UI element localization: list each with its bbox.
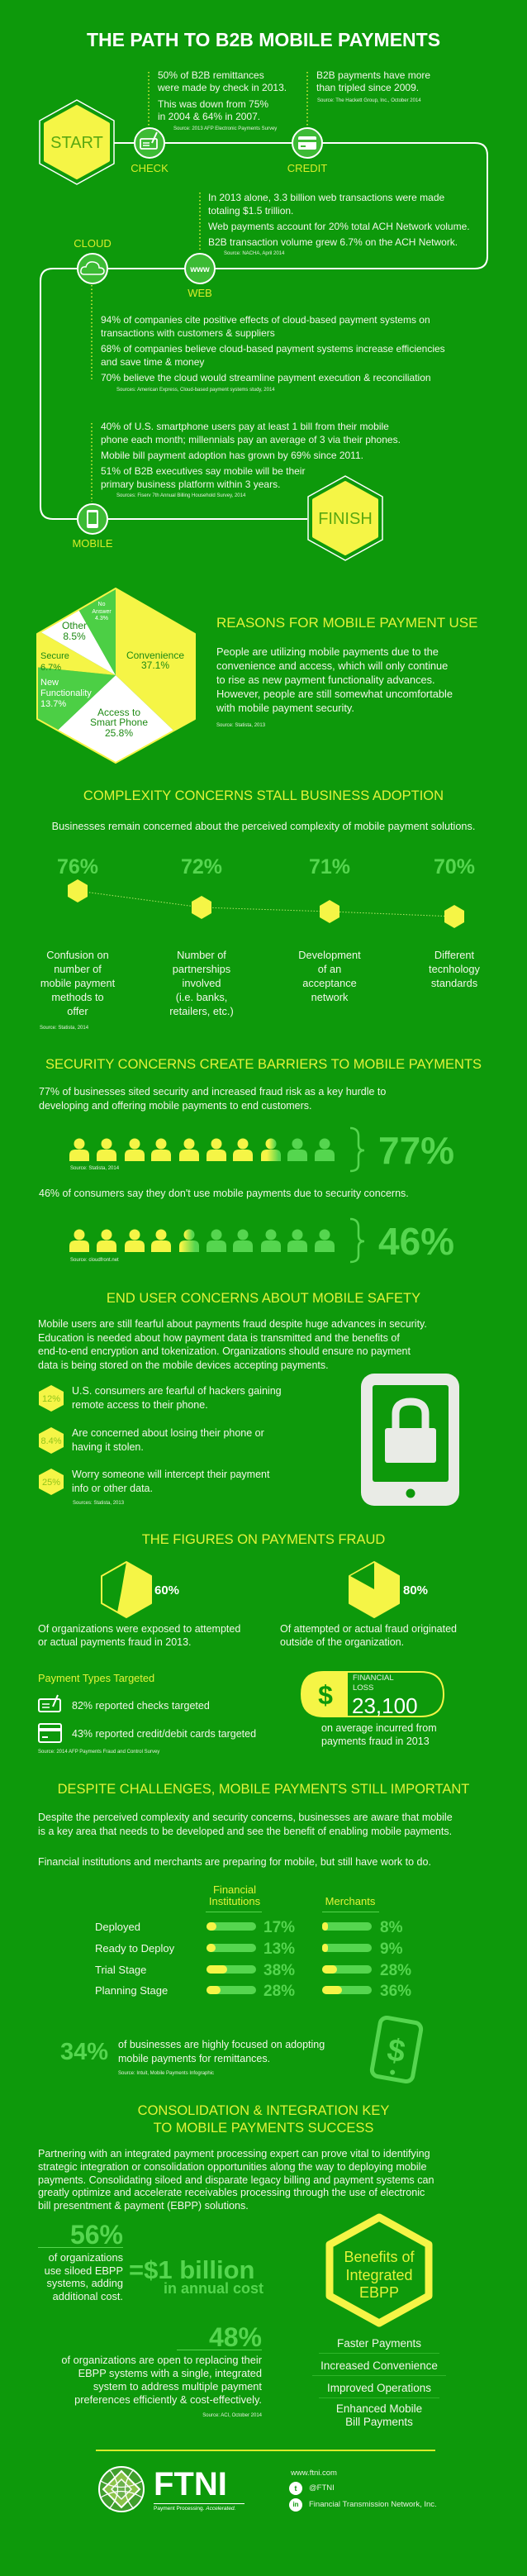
complexity labels: number of	[54, 963, 102, 975]
heading: end user: END USER CONCERNS ABOUT MOBILE SAFETY	[107, 1291, 420, 1306]
text: despite	[38, 1812, 453, 1837]
chart: readiness bars: Merchants	[325, 1895, 375, 1907]
heading: reasons: REASONS FOR MOBILE PAYMENT USE	[216, 615, 477, 631]
complexity labels: partnerships	[173, 963, 230, 975]
callout: financial loss: $	[318, 1680, 333, 1710]
complexity labels	[40, 949, 480, 1017]
text: Worry someone will intercept their payment	[72, 1469, 269, 1480]
text: Are concerned about losing their phone or	[72, 1427, 264, 1439]
text: reasons: with mobile payment security.	[216, 702, 354, 714]
text: 48%: system to address multiple payment	[93, 2380, 262, 2393]
chart: readiness bars: 17%	[264, 1919, 295, 1936]
label: web: WEB	[188, 287, 212, 299]
pie chart hexagon: Other	[62, 620, 87, 631]
pie chart hexagon: Access to	[97, 707, 140, 718]
payment types list: 82% reported checks targeted	[72, 1700, 210, 1712]
complexity labels: mobile payment	[40, 977, 115, 989]
chart: complexity	[57, 855, 475, 928]
chart: complexity: 76%	[57, 855, 98, 879]
START hexagon	[40, 100, 114, 184]
text: mobile facts	[101, 421, 401, 490]
text: credit facts: than tripled since 2009.	[316, 82, 419, 93]
source: cloud: Sources: American Express, Cloud-based payment systems study, 2014	[116, 388, 275, 393]
source: mobile: Sources: Fiserv 7th Annual Billing Household Survey, 2014	[116, 493, 245, 498]
START hexagon: START	[50, 134, 103, 152]
text: web facts: totaling $1.5 trillion. Web payments account for 20% total ACH Network volume. B2B transaction volume grew 6.7% on the ACH Network.	[208, 205, 470, 248]
text: 48%	[61, 2354, 262, 2406]
complexity labels: Development	[298, 949, 361, 961]
bullet hexagons: 12%	[42, 1394, 60, 1404]
complexity labels: of an	[318, 963, 341, 975]
text: 34%	[118, 2039, 325, 2064]
text: end user: data is being stored on the mobile devices accepting payments.	[38, 1359, 329, 1371]
chart: fraud hexagons	[101, 1561, 428, 1618]
chart: readiness bars: Trial Stage	[95, 1964, 146, 1976]
text: reasons: to rise as new payment functionality advances.	[216, 674, 435, 686]
callout: financial loss	[301, 1671, 444, 1718]
bullet hexagons: 8.4%	[40, 1436, 62, 1446]
complexity labels: network	[311, 991, 348, 1003]
text: check facts: were made by check in 2013. This was down from 75%	[158, 82, 287, 110]
footer contacts: @FTNI	[309, 2483, 335, 2493]
complexity labels: methods to	[51, 991, 104, 1003]
footer contacts: www.ftni.com	[291, 2469, 337, 2478]
chart: readiness bars: Deployed	[95, 1921, 140, 1933]
text: fraud 80: Of attempted or actual fraud originated	[280, 1623, 457, 1635]
title: THE PATH TO B2B MOBILE PAYMENTS	[87, 29, 440, 50]
text: fraud 60: or actual payments fraud in 2013.	[38, 1636, 192, 1648]
text: complexity: Businesses remain concerned about the perceived complexity of mobile payment solutions.	[52, 821, 475, 832]
hexagon: benefits: Benefits of	[344, 2249, 415, 2265]
pie chart hexagon: 13.7%	[40, 699, 66, 709]
hexagon: benefits: EBPP	[359, 2284, 399, 2301]
text: consolidation: Partnering with an integrated payment processing expert can prove vital to identifying	[38, 2148, 430, 2159]
complexity labels: involved	[183, 977, 221, 989]
complexity labels: Number of	[177, 949, 226, 961]
text: cloud facts	[101, 314, 445, 383]
text: info or other data.	[72, 1483, 153, 1494]
text: cloud facts: and save time & money 70% believe the cloud would streamline payment execution & reconciliation	[101, 355, 431, 383]
path diagram	[39, 72, 488, 561]
payment types list: 43% reported credit/debit cards targeted	[72, 1728, 256, 1740]
pie chart hexagon	[36, 588, 196, 764]
text: 48%: EBPP systems with a single, integrated	[78, 2367, 262, 2379]
text: fraud 80	[280, 1623, 457, 1648]
complexity labels: retailers, etc.)	[169, 1005, 234, 1017]
text: 46% consumers: 46% of consumers say they don't use mobile payments due to security concerns.	[39, 1188, 409, 1199]
pie chart hexagon: 8.5%	[63, 631, 86, 642]
heading: consolidation: CONSOLIDATION & INTEGRATION KEY	[138, 2103, 389, 2118]
text: consolidation: payments. Consolidating siloed and disparate legacy billing and payment systems can	[38, 2174, 434, 2186]
chart: readiness bars: Institutions	[209, 1895, 260, 1907]
chart: complexity: 72%	[181, 855, 222, 879]
stat: $1 billion: =$1 billion	[129, 2255, 254, 2284]
label: credit: CREDIT	[287, 162, 327, 174]
source: 34%: Source: Intuit, Mobile Payments Infographic	[118, 2071, 214, 2076]
chart: complexity: 70%	[434, 855, 475, 879]
complexity labels: tecnhology	[429, 963, 480, 975]
icon: phone with lock	[361, 1374, 459, 1506]
text: 56%	[45, 2251, 123, 2302]
text: end user	[38, 1318, 427, 1371]
callout: financial loss: 23,100	[352, 1693, 418, 1718]
stat: 34%: 34%	[60, 2039, 108, 2065]
list: benefits: Bill Payments	[345, 2416, 413, 2428]
text: end user: end-to-end encryption and tokenization. Organizations should ensure no payment	[38, 1345, 411, 1357]
text: 34%: of businesses are highly focused on adopting	[118, 2039, 325, 2050]
text: 48%: preferences efficiently & cost-effectively.	[74, 2393, 262, 2406]
stat: 48%: 48%	[209, 2322, 262, 2352]
text: consolidation: bill presentment & payment (EBPP) solutions.	[38, 2200, 249, 2212]
bullet hexagons: 25%	[42, 1478, 60, 1488]
list: benefits: Enhanced Mobile	[336, 2402, 422, 2415]
pie chart hexagon: Smart Phone	[90, 717, 148, 728]
text: web facts: In 2013 alone, 3.3 billion web transactions were made	[208, 192, 444, 203]
chart: readiness bars: Ready to Deploy	[95, 1942, 175, 1955]
text: end user: Mobile users are still fearful about payments fraud despite huge advances in security.	[38, 1318, 427, 1330]
text: in annual cost	[164, 2280, 264, 2297]
text: loss	[321, 1722, 437, 1747]
pie chart hexagon: 25.8%	[105, 727, 133, 739]
icon: web	[185, 254, 215, 283]
text: 34%: mobile payments for remittances.	[118, 2053, 270, 2064]
source: security 2: Source: cloudfront.net	[70, 1258, 119, 1263]
complexity labels: acceptance	[302, 977, 357, 989]
chart: readiness bars: 38%	[264, 1962, 295, 1979]
hexagon: benefits	[325, 2213, 433, 2327]
text: cloud facts: 94% of companies cite positive effects of cloud-based payment systems on	[101, 314, 430, 326]
text: loss: payments fraud in 2013	[321, 1736, 430, 1747]
text: Financial institutions and merchants are preparing for mobile, but still have work to do.	[38, 1856, 431, 1868]
pie chart hexagon: Convenience	[126, 650, 184, 661]
FINISH hexagon	[308, 476, 382, 560]
text: 56%: use siloed EBPP	[45, 2264, 123, 2277]
source: web: Source: NACHA, April 2014	[224, 251, 284, 256]
chart: readiness bars: 36%	[380, 1983, 411, 2000]
heading: payment types: Payment Types Targeted	[38, 1672, 154, 1684]
source: reasons: Source: Statista, 2013	[216, 723, 265, 728]
text: security	[39, 1086, 386, 1112]
text: cloud facts: transactions with customers & suppliers 68% of companies believe cloud-based payment systems increase efficiencies	[101, 327, 445, 355]
footer contacts: in	[292, 2501, 299, 2508]
footer contacts: t	[294, 2484, 297, 2493]
footer contacts	[289, 2469, 437, 2512]
list: benefits	[312, 2337, 446, 2428]
bullet texts: U.S. consumers are fearful of hackers gaining	[72, 1385, 282, 1397]
text: reasons: People are utilizing mobile payments due to the	[216, 645, 439, 658]
text: fraud 60	[38, 1623, 240, 1648]
chart: readiness bars: 13%	[264, 1940, 295, 1958]
list: benefits: Improved Operations	[327, 2382, 431, 2394]
source: end user: Sources: Statista, 2013	[73, 1501, 124, 1506]
complexity labels: Different	[434, 949, 474, 961]
icon: check	[135, 128, 164, 158]
label: cloud: CLOUD	[74, 237, 112, 250]
heading: fraud: THE FIGURES ON PAYMENTS FRAUD	[142, 1532, 385, 1547]
logo: FTNI: Payment Processing. Accelerated.	[154, 2506, 235, 2512]
text: mobile facts: phone each month; millennials pay an average of 3 via their phones. Mobile bill payment adoption has grown by 69% since 2011. 51% of B2B executives say mobile will be their	[101, 434, 401, 477]
stat: 48%	[177, 2324, 262, 2350]
icon: web: www	[189, 265, 210, 274]
callout: financial loss: FINANCIAL	[353, 1674, 394, 1683]
text: check facts	[158, 69, 287, 122]
icon: phone dollar	[370, 2016, 423, 2083]
pie chart hexagon: Answer	[92, 609, 112, 615]
heading: security: SECURITY CONCERNS CREATE BARRIERS TO MOBILE PAYMENTS	[45, 1057, 482, 1072]
complexity labels: standards	[431, 977, 477, 989]
chart: readiness bars: 9%	[380, 1940, 403, 1958]
heading: complexity: COMPLEXITY CONCERNS STALL BUSINESS ADOPTION	[83, 788, 444, 803]
chart: fraud hexagons: 80%	[403, 1583, 428, 1598]
chart: readiness bars: 28%	[264, 1983, 295, 2000]
pie chart hexagon: New	[40, 678, 59, 688]
text: fraud 80: outside of the organization.	[280, 1636, 404, 1648]
heading: despite: DESPITE CHALLENGES, MOBILE PAYMENTS STILL IMPORTANT	[58, 1782, 469, 1797]
stat: 77%: 77%	[378, 1129, 454, 1172]
text: security: developing and offering mobile payments to end customers.	[39, 1100, 312, 1112]
icon: cloud	[78, 254, 107, 283]
logo: FTNI: FTNI	[154, 2466, 227, 2502]
pie chart hexagon: 37.1%	[141, 659, 169, 671]
text: having it stolen.	[72, 1441, 144, 1453]
bullet hexagons	[39, 1385, 64, 1495]
hexagon: benefits: Integrated	[345, 2266, 413, 2283]
text: reasons: However, people are still somewhat uncomfortable	[216, 688, 453, 700]
callout: financial loss: LOSS	[353, 1683, 373, 1693]
icon: credit card	[292, 128, 322, 158]
source: complexity: Source: Statista, 2014	[40, 1026, 88, 1031]
heading: consolidation: TO MOBILE PAYMENTS SUCCESS	[154, 2121, 373, 2136]
text: consolidation: strategic integration or consolidation opportunities along the way to deploying mobile	[38, 2161, 426, 2173]
text: security: 77% of businesses sited security and increased fraud risk as a key hurdle to	[39, 1086, 386, 1098]
source: fraud: Source: 2014 AFP Payments Fraud and Control Survey	[38, 1750, 159, 1755]
people chart 46%	[69, 1218, 364, 1263]
text: despite: is a key area that needs to be developed and see the benefit of enabling mobile payments.	[38, 1826, 452, 1837]
text: loss: on average incurred from	[321, 1722, 437, 1734]
list: benefits: Faster Payments	[337, 2337, 421, 2350]
chart: readiness bars: Planning Stage	[95, 1984, 168, 1997]
text: credit facts	[316, 69, 430, 93]
text: credit facts: B2B payments have more	[316, 69, 430, 81]
stat: 46%: 46%	[378, 1220, 454, 1263]
chart: readiness bars: 8%	[380, 1919, 403, 1936]
text: 48%: of organizations are open to replacing their	[61, 2354, 262, 2366]
chart: readiness bars: Financial	[213, 1883, 256, 1896]
text: reasons	[216, 645, 453, 714]
icon: mobile	[78, 504, 107, 534]
stat: 56%	[38, 2221, 123, 2248]
label: check: CHECK	[131, 162, 169, 174]
chart: fraud hexagons: 60%	[154, 1583, 179, 1598]
complexity labels: Confusion on	[46, 949, 109, 961]
text: end user: Education is needed about how payment data is transmitted and the benefits of	[38, 1332, 400, 1344]
text: check facts: in 2004 & 64% in 2007.	[158, 111, 260, 122]
text: consolidation	[38, 2148, 434, 2212]
source: security 1: Source: Statista, 2014	[70, 1166, 119, 1171]
chart: readiness bars	[95, 1883, 411, 2000]
chart: readiness bars: 28%	[380, 1962, 411, 1979]
pie chart hexagon: 6.7%	[40, 663, 61, 673]
text: 56%: additional cost.	[53, 2290, 123, 2302]
FINISH hexagon: FINISH	[318, 510, 373, 528]
chart: complexity: 71%	[309, 855, 350, 879]
pie chart hexagon: 4.3%	[95, 616, 108, 621]
pie chart hexagon: Functionality	[40, 688, 92, 698]
text: check facts: 50% of B2B remittances	[158, 69, 264, 81]
text: reasons: convenience and access, which will only continue	[216, 659, 448, 672]
bullet texts	[72, 1385, 282, 1411]
pie chart hexagon: No	[98, 602, 106, 607]
stat: 56%: 56%	[70, 2220, 123, 2250]
logo: FTNI	[98, 2466, 245, 2512]
text: 56%: systems, adding	[47, 2277, 123, 2289]
people chart 77%	[69, 1127, 364, 1172]
label: mobile: MOBILE	[72, 537, 113, 550]
heading: consolidation	[138, 2103, 389, 2136]
complexity labels: offer	[67, 1005, 88, 1017]
source: check: Source: 2013 AFP Electronic Payments Survey	[173, 126, 277, 131]
text: consolidation: greatly optimize and accelerate receivables processing through the use of electronic	[38, 2187, 425, 2198]
icon: phone dollar: $	[385, 2032, 408, 2069]
list: benefits: Increased Convenience	[320, 2359, 438, 2372]
footer contacts: Financial Transmission Network, Inc.	[309, 2500, 437, 2509]
pie chart hexagon: Secure	[40, 651, 69, 661]
text: fraud 60: Of organizations were exposed to attempted	[38, 1623, 240, 1635]
complexity labels: (i.e. banks,	[176, 991, 227, 1003]
payment types list	[38, 1694, 256, 1743]
text: mobile facts: primary business platform within 3 years.	[101, 479, 280, 490]
bullet texts: remote access to their phone.	[72, 1399, 208, 1411]
text: mobile facts: 40% of U.S. smartphone users pay at least 1 bill from their mobile	[101, 421, 389, 432]
source: credit: Source: The Hackett Group, Inc., October 2014	[317, 98, 421, 103]
text: despite: Despite the perceived complexity and security concerns, businesses are aware that mobile	[38, 1812, 453, 1823]
text: 56%: of organizations	[49, 2251, 123, 2264]
source: consolidation: Source: ACI, October 2014	[202, 2413, 262, 2418]
